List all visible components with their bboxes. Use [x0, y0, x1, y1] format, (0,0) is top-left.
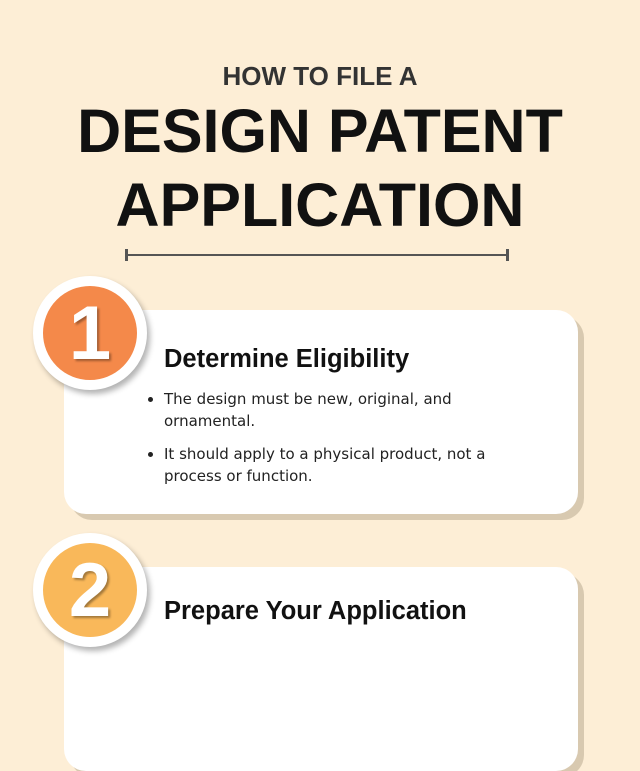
icon: number 1: 1 [69, 291, 111, 376]
icon: number 2: 2 [69, 548, 111, 633]
bullet list: step 1: The design must be new, original, and ornamental. [164, 390, 452, 430]
heading: step 1: Determine Eligibility [164, 345, 409, 373]
panel: step 2 [64, 567, 578, 771]
title [77, 61, 563, 239]
divider line [125, 249, 509, 261]
heading: step 2: Prepare Your Application [164, 597, 467, 625]
title: APPLICATION [116, 171, 524, 239]
icon: number 2 [33, 533, 147, 647]
bullet list: step 1: It should apply to a physical product, not a process or function. [164, 445, 485, 485]
panel: step 1 [64, 310, 578, 514]
title: DESIGN PATENT [77, 97, 563, 165]
bullet list: step 1 [148, 390, 485, 485]
icon: number 1 [33, 276, 147, 390]
title: HOW TO FILE A [222, 61, 418, 91]
